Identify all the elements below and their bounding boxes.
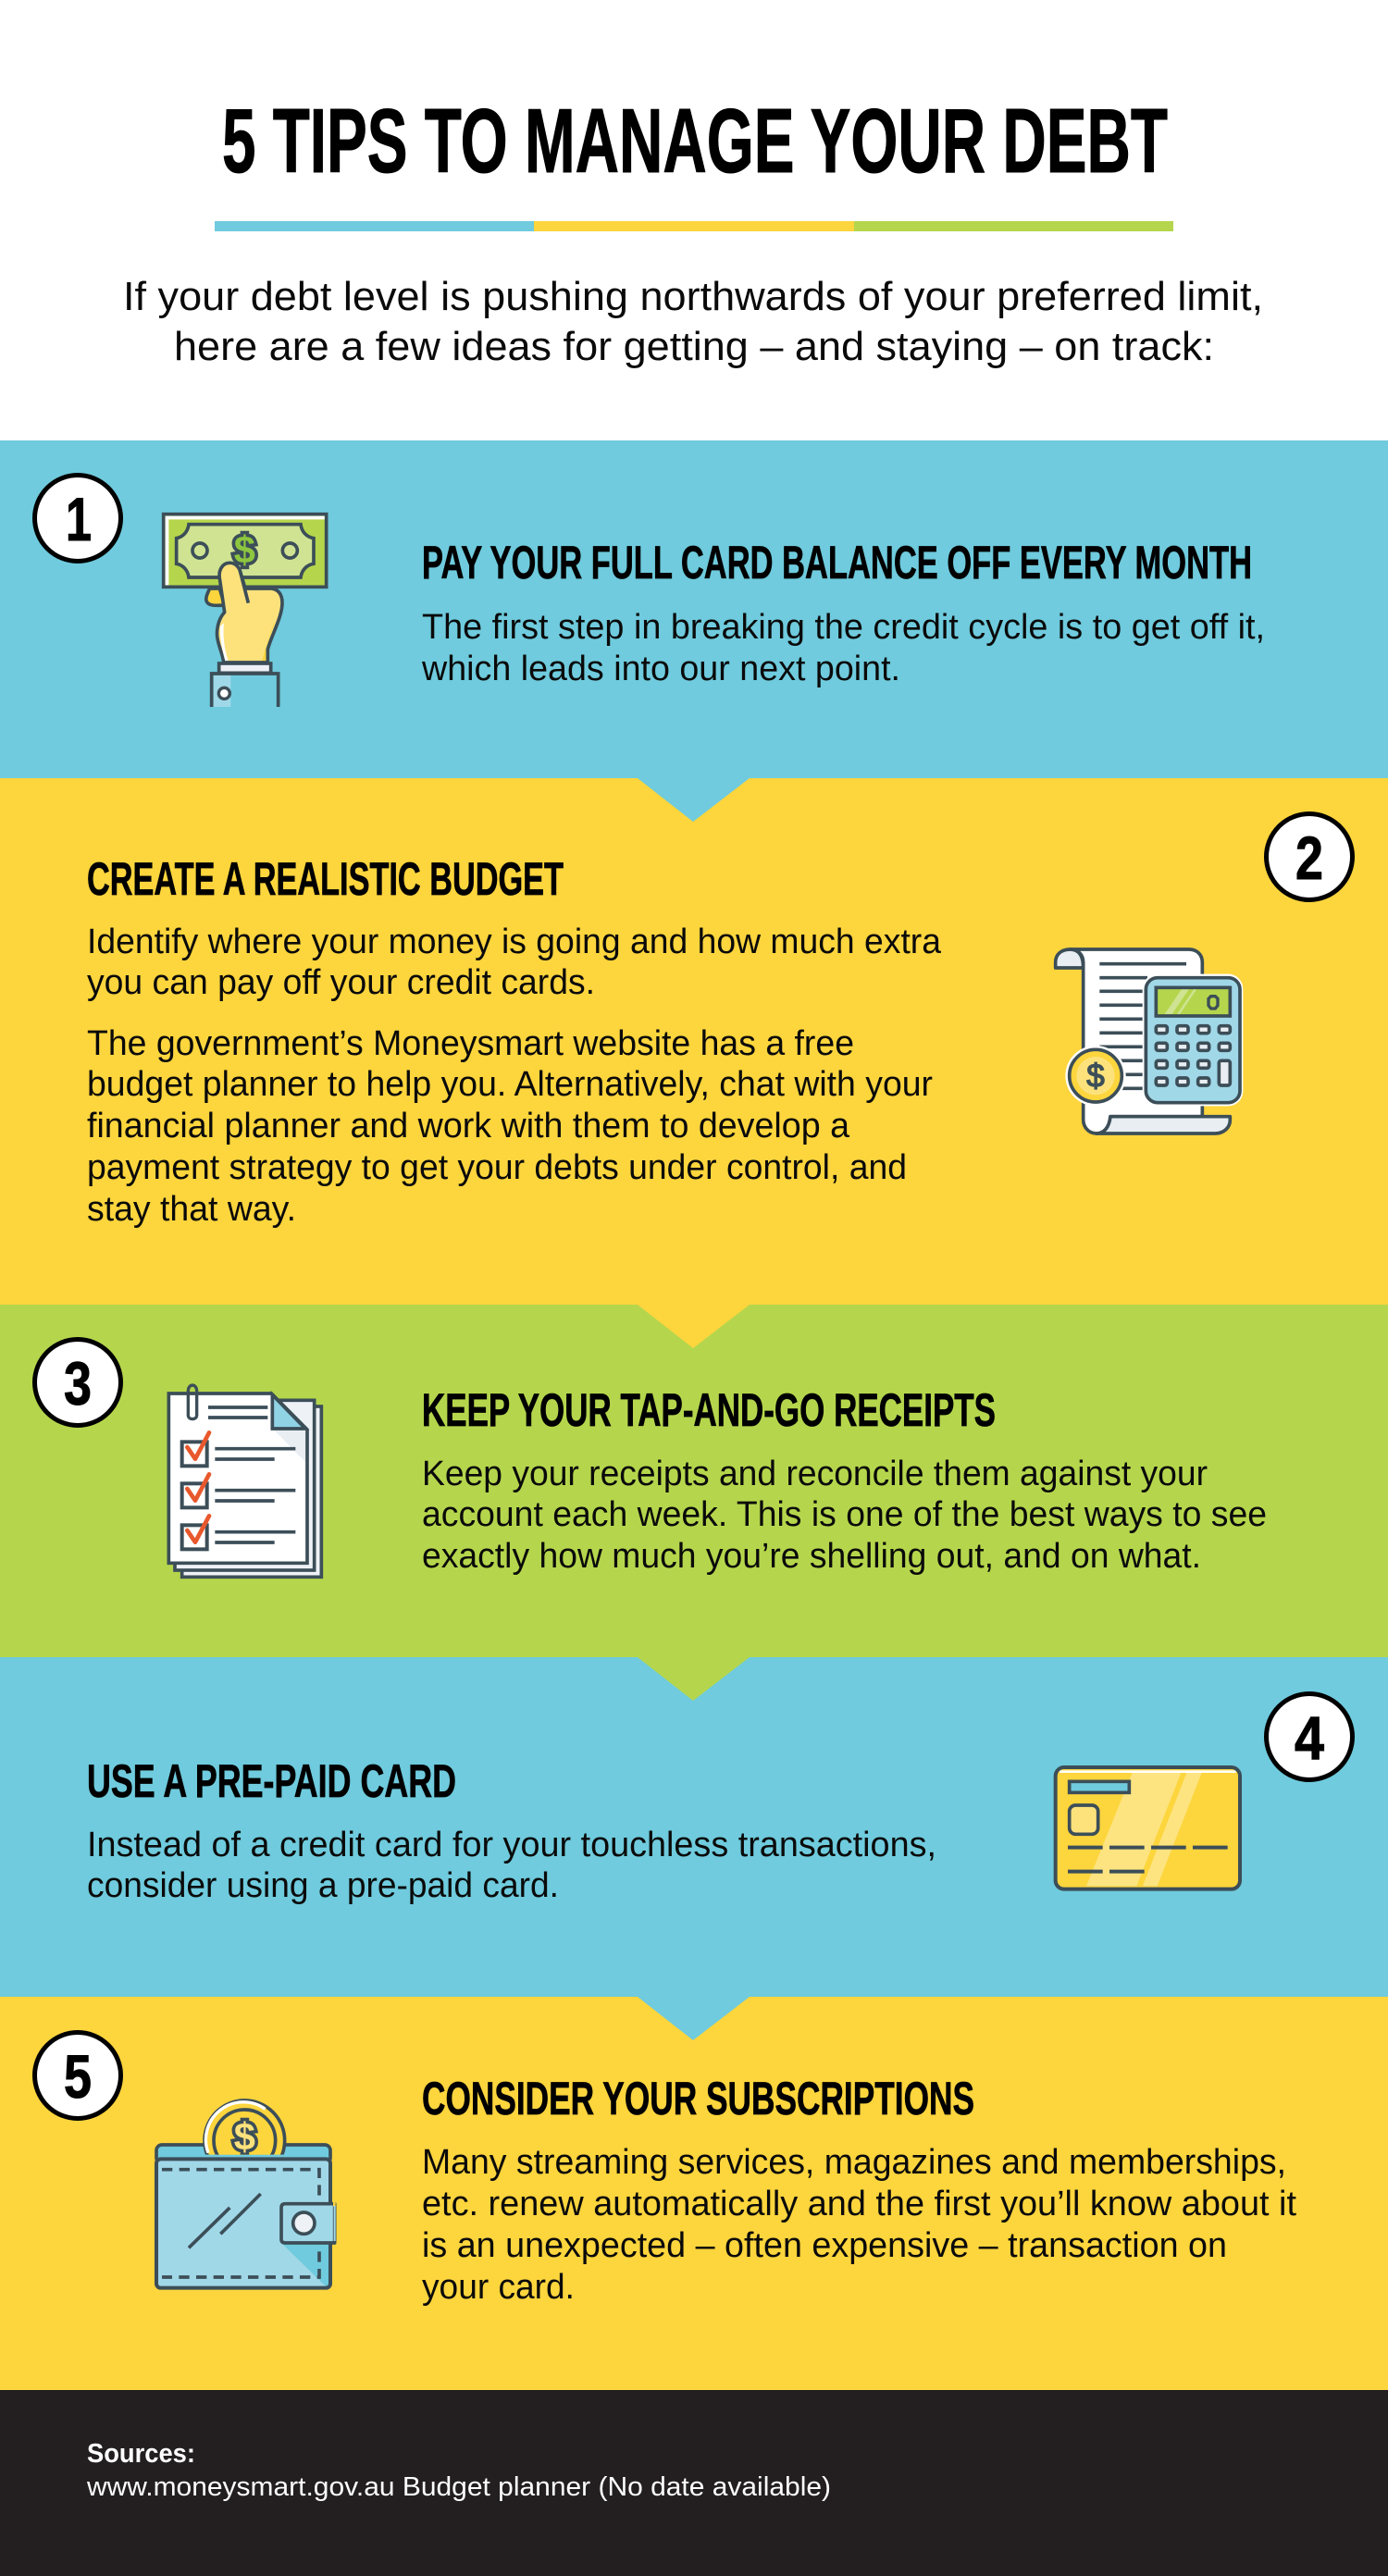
sources text: www.moneysmart.gov.au Budget planner (No date available): [86, 2472, 831, 2502]
icon: pre-paid card: [1056, 1767, 1240, 1889]
intro text: [123, 274, 1263, 369]
number badge 2: 2: [1295, 824, 1323, 892]
icon: hand holding banknote: [164, 514, 327, 707]
heading: tip 2: CREATE A REALISTIC BUDGET: [87, 853, 564, 905]
panel: tip 3: [0, 1305, 1388, 1657]
panel: tip 2: [0, 778, 1388, 1305]
icon: hand holding banknote: $: [234, 528, 255, 572]
arrow: blue pointer: [638, 1997, 750, 2040]
body text: tip 1: The first step in breaking the credit cycle is to get off it,: [422, 608, 1265, 647]
body text: tip 5: is an unexpected – often expensive – transaction on: [422, 2226, 1227, 2265]
number badge 4: 4: [1295, 1703, 1324, 1772]
heading: tip 4: USE A PRE-PAID CARD: [87, 1755, 456, 1807]
icon: checklist: [168, 1385, 321, 1577]
body text: tip 4: Instead of a credit card for your touchless transactions,: [87, 1826, 936, 1864]
body text: tip 3: account each week. This is one of the best ways to see: [422, 1495, 1267, 1534]
body text: tip 4: [87, 1826, 936, 1905]
heading: tip 5: CONSIDER YOUR SUBSCRIPTIONS: [422, 2073, 974, 2124]
body text: tip 2: budget planner to help you. Alternatively, chat with your: [87, 1065, 933, 1104]
arrow: blue pointer: [638, 778, 750, 822]
number badge 5: 5: [64, 2042, 92, 2111]
panel: tip 4: [0, 1657, 1388, 1997]
tri-colour title rule: [215, 221, 1173, 231]
body text: tip 2: [87, 923, 942, 1229]
body text: tip 2: stay that way.: [87, 1190, 296, 1229]
body text: tip 2: The government’s Moneysmart website has a free: [87, 1024, 854, 1063]
panel: tip 1: [0, 440, 1388, 778]
number badge 1: [35, 476, 120, 561]
sources text: Sources:: [87, 2439, 195, 2469]
panel: sources footer: [0, 2390, 1388, 2576]
body text: tip 3: Keep your receipts and reconcile them against your: [422, 1455, 1208, 1493]
icon: receipt and calculator: $: [1086, 1059, 1105, 1095]
body text: tip 3: [422, 1455, 1267, 1576]
body text: tip 3: exactly how much you’re shelling out, and on what.: [422, 1537, 1201, 1576]
intro text: If your debt level is pushing northwards of your preferred limit,: [123, 274, 1263, 319]
body text: tip 5: etc. renew automatically and the first you’ll know about it: [422, 2185, 1296, 2223]
body text: tip 5: your card.: [422, 2268, 575, 2307]
number badge 4: [1266, 1693, 1353, 1780]
panel: tip 5: [0, 1997, 1388, 2390]
body text: tip 2: financial planner and work with them to develop a: [87, 1107, 850, 1146]
icon: wallet with coin: $: [234, 2114, 255, 2158]
number badge 2: [1266, 814, 1353, 899]
number badge 5: [35, 2032, 120, 2119]
arrow: green pointer: [638, 1657, 750, 1701]
sources text: [86, 2439, 831, 2502]
body text: tip 2: Identify where your money is going and how much extra: [87, 923, 942, 961]
heading: tip 3: KEEP YOUR TAP-AND-GO RECEIPTS: [422, 1384, 996, 1436]
icon: receipt and calculator: [1056, 949, 1243, 1133]
body text: tip 4: consider using a pre-paid card.: [87, 1866, 559, 1905]
body text: tip 2: you can pay off your credit cards.: [87, 963, 595, 1002]
number badge 3: [35, 1340, 120, 1425]
number badge 1: 1: [66, 485, 92, 553]
body text: tip 5: Many streaming services, magazines and memberships,: [422, 2143, 1286, 2182]
body text: tip 1: which leads into our next point.: [421, 650, 900, 688]
number badge 3: 3: [64, 1349, 92, 1418]
body text: tip 2: payment strategy to get your debts under control, and: [87, 1148, 907, 1187]
intro text: here are a few ideas for getting – and staying – on track:: [174, 324, 1214, 369]
icon: wallet with coin: [156, 2100, 336, 2288]
arrow: yellow pointer: [638, 1305, 750, 1348]
body text: tip 1: [421, 608, 1265, 688]
body text: tip 5: [422, 2143, 1296, 2307]
